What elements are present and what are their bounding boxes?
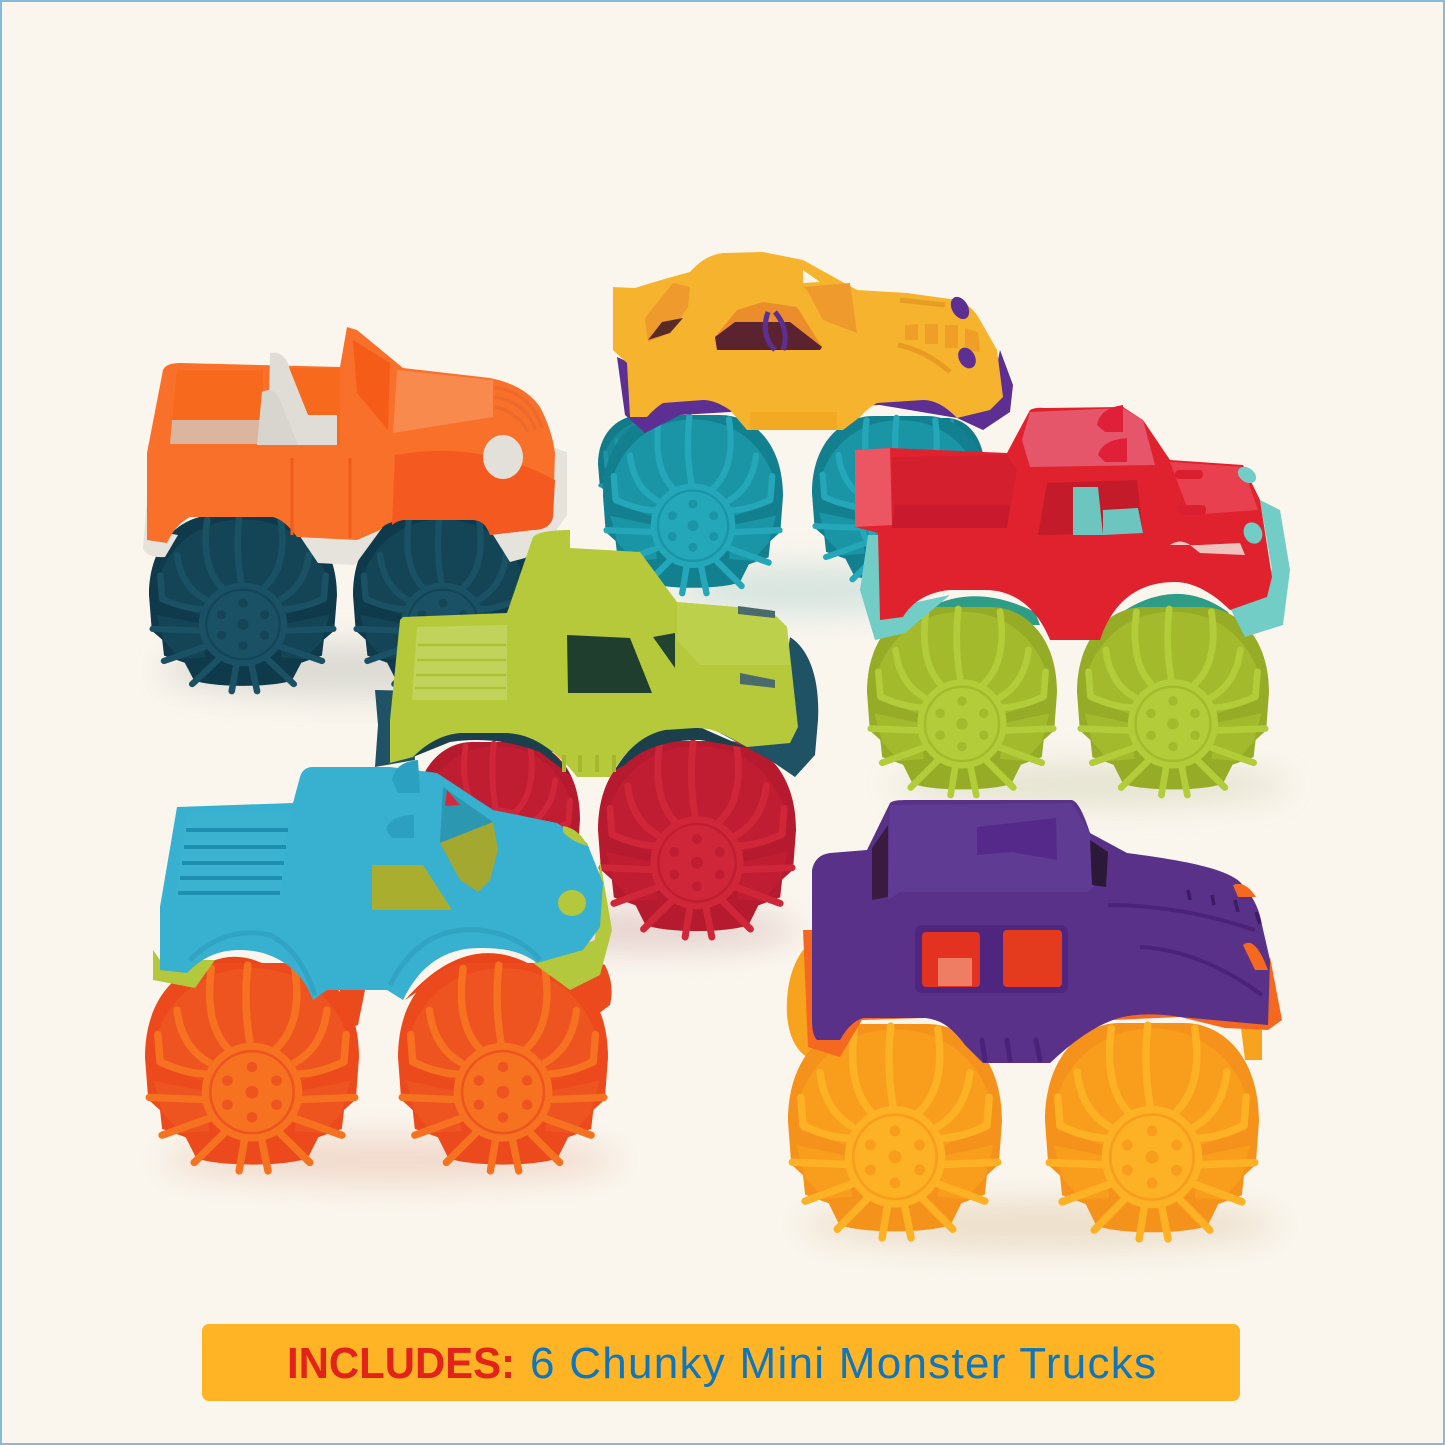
rear window [645, 283, 690, 342]
bed ribs [415, 645, 506, 688]
rear wheel edges [340, 955, 612, 1030]
orange body [147, 327, 555, 543]
bed floor [170, 420, 260, 444]
windshield [440, 822, 498, 892]
hood bumps [1175, 470, 1203, 479]
body seams [292, 458, 350, 538]
bed floor shadow [892, 505, 1010, 528]
window frame [915, 925, 1068, 993]
hood [393, 370, 493, 433]
background gap triangle [803, 270, 820, 283]
grille lines [495, 387, 542, 432]
roof tabs [386, 760, 420, 838]
hood [677, 602, 790, 665]
small red gap [445, 790, 460, 806]
orange lamps [1233, 884, 1268, 970]
headlight [483, 435, 523, 479]
banner background [202, 1324, 1240, 1401]
teal seat [1073, 487, 1143, 535]
roof panel [888, 803, 1100, 900]
side window [567, 635, 652, 693]
side window [715, 302, 822, 350]
wheel arch fill [185, 953, 540, 1000]
roof [1022, 408, 1155, 467]
hood creases [1108, 905, 1262, 995]
green body [390, 530, 798, 777]
teal lamps [1235, 464, 1259, 486]
lime headlights [558, 890, 586, 916]
red windows [922, 932, 980, 987]
red body [855, 407, 1272, 640]
bed ribs [178, 830, 288, 893]
hood grille [905, 324, 980, 352]
truck: lime green pickup with crimson wheels [375, 530, 818, 937]
rear wheels [598, 415, 985, 537]
teal bumper [860, 500, 1290, 640]
white chassis [143, 448, 567, 565]
lime chassis [153, 860, 612, 990]
truck: orange pickup with dark teal wheels [143, 327, 567, 691]
truck: yellow race car with teal wheels [598, 252, 1013, 593]
wheel arch highlights [190, 930, 540, 995]
hood panel [1170, 462, 1258, 515]
front wheels [603, 415, 988, 593]
banner text: INCLUDES: [287, 1339, 515, 1388]
windshield [653, 633, 675, 668]
rear cargo red [873, 897, 890, 910]
wheels [414, 741, 796, 937]
yellow body [613, 252, 1003, 430]
dark wheel arch fills [413, 725, 747, 775]
purple lamps [947, 294, 973, 322]
roof scoop [977, 818, 1057, 860]
windshield top gap [440, 787, 493, 843]
truck: blue pickup with orange wheels [145, 760, 612, 1171]
wheels [867, 607, 1269, 795]
hood ridges [898, 300, 950, 372]
truck bed [175, 813, 290, 898]
side window [372, 865, 452, 910]
includes banner [202, 1324, 1240, 1401]
dark chassis and bumper [375, 637, 818, 777]
door ribs [982, 1040, 1040, 1060]
hinge detail [750, 412, 837, 430]
right window gap [1090, 840, 1108, 887]
windshield frame [353, 340, 390, 430]
rear cabin panel [290, 368, 340, 445]
car windows [645, 270, 857, 350]
door ribs [564, 755, 614, 772]
banner text: 6 Chunky Mini Monster Trucks [530, 1339, 1156, 1388]
hood vents [738, 606, 775, 688]
seat loop [765, 312, 785, 350]
bed interior [892, 455, 1017, 528]
nose shading [392, 451, 555, 535]
windshield [803, 283, 857, 333]
hood vents [1188, 890, 1260, 924]
ground shadows [160, 565, 1290, 1249]
spoiler [855, 448, 892, 527]
truck: red pickup with lime wheels [855, 405, 1290, 795]
blue body [160, 767, 603, 1000]
seats [257, 353, 337, 445]
wheels [145, 963, 608, 1171]
wheel arch fill [905, 594, 1235, 625]
wheels [149, 515, 533, 691]
bed interior [170, 370, 263, 443]
purple body [812, 800, 1270, 1063]
truck bed [412, 625, 507, 700]
side window [1038, 480, 1143, 535]
roof lamps [1097, 405, 1127, 462]
purple chassis [617, 350, 1013, 433]
rear window gap [872, 825, 888, 900]
orange chassis [803, 930, 1282, 1057]
rear wheel edge [787, 950, 1262, 1060]
truck: purple SUV with amber wheels [787, 800, 1282, 1239]
front wheels [788, 1023, 1259, 1239]
reflection in window [938, 958, 972, 986]
grille highlight [1170, 542, 1245, 555]
